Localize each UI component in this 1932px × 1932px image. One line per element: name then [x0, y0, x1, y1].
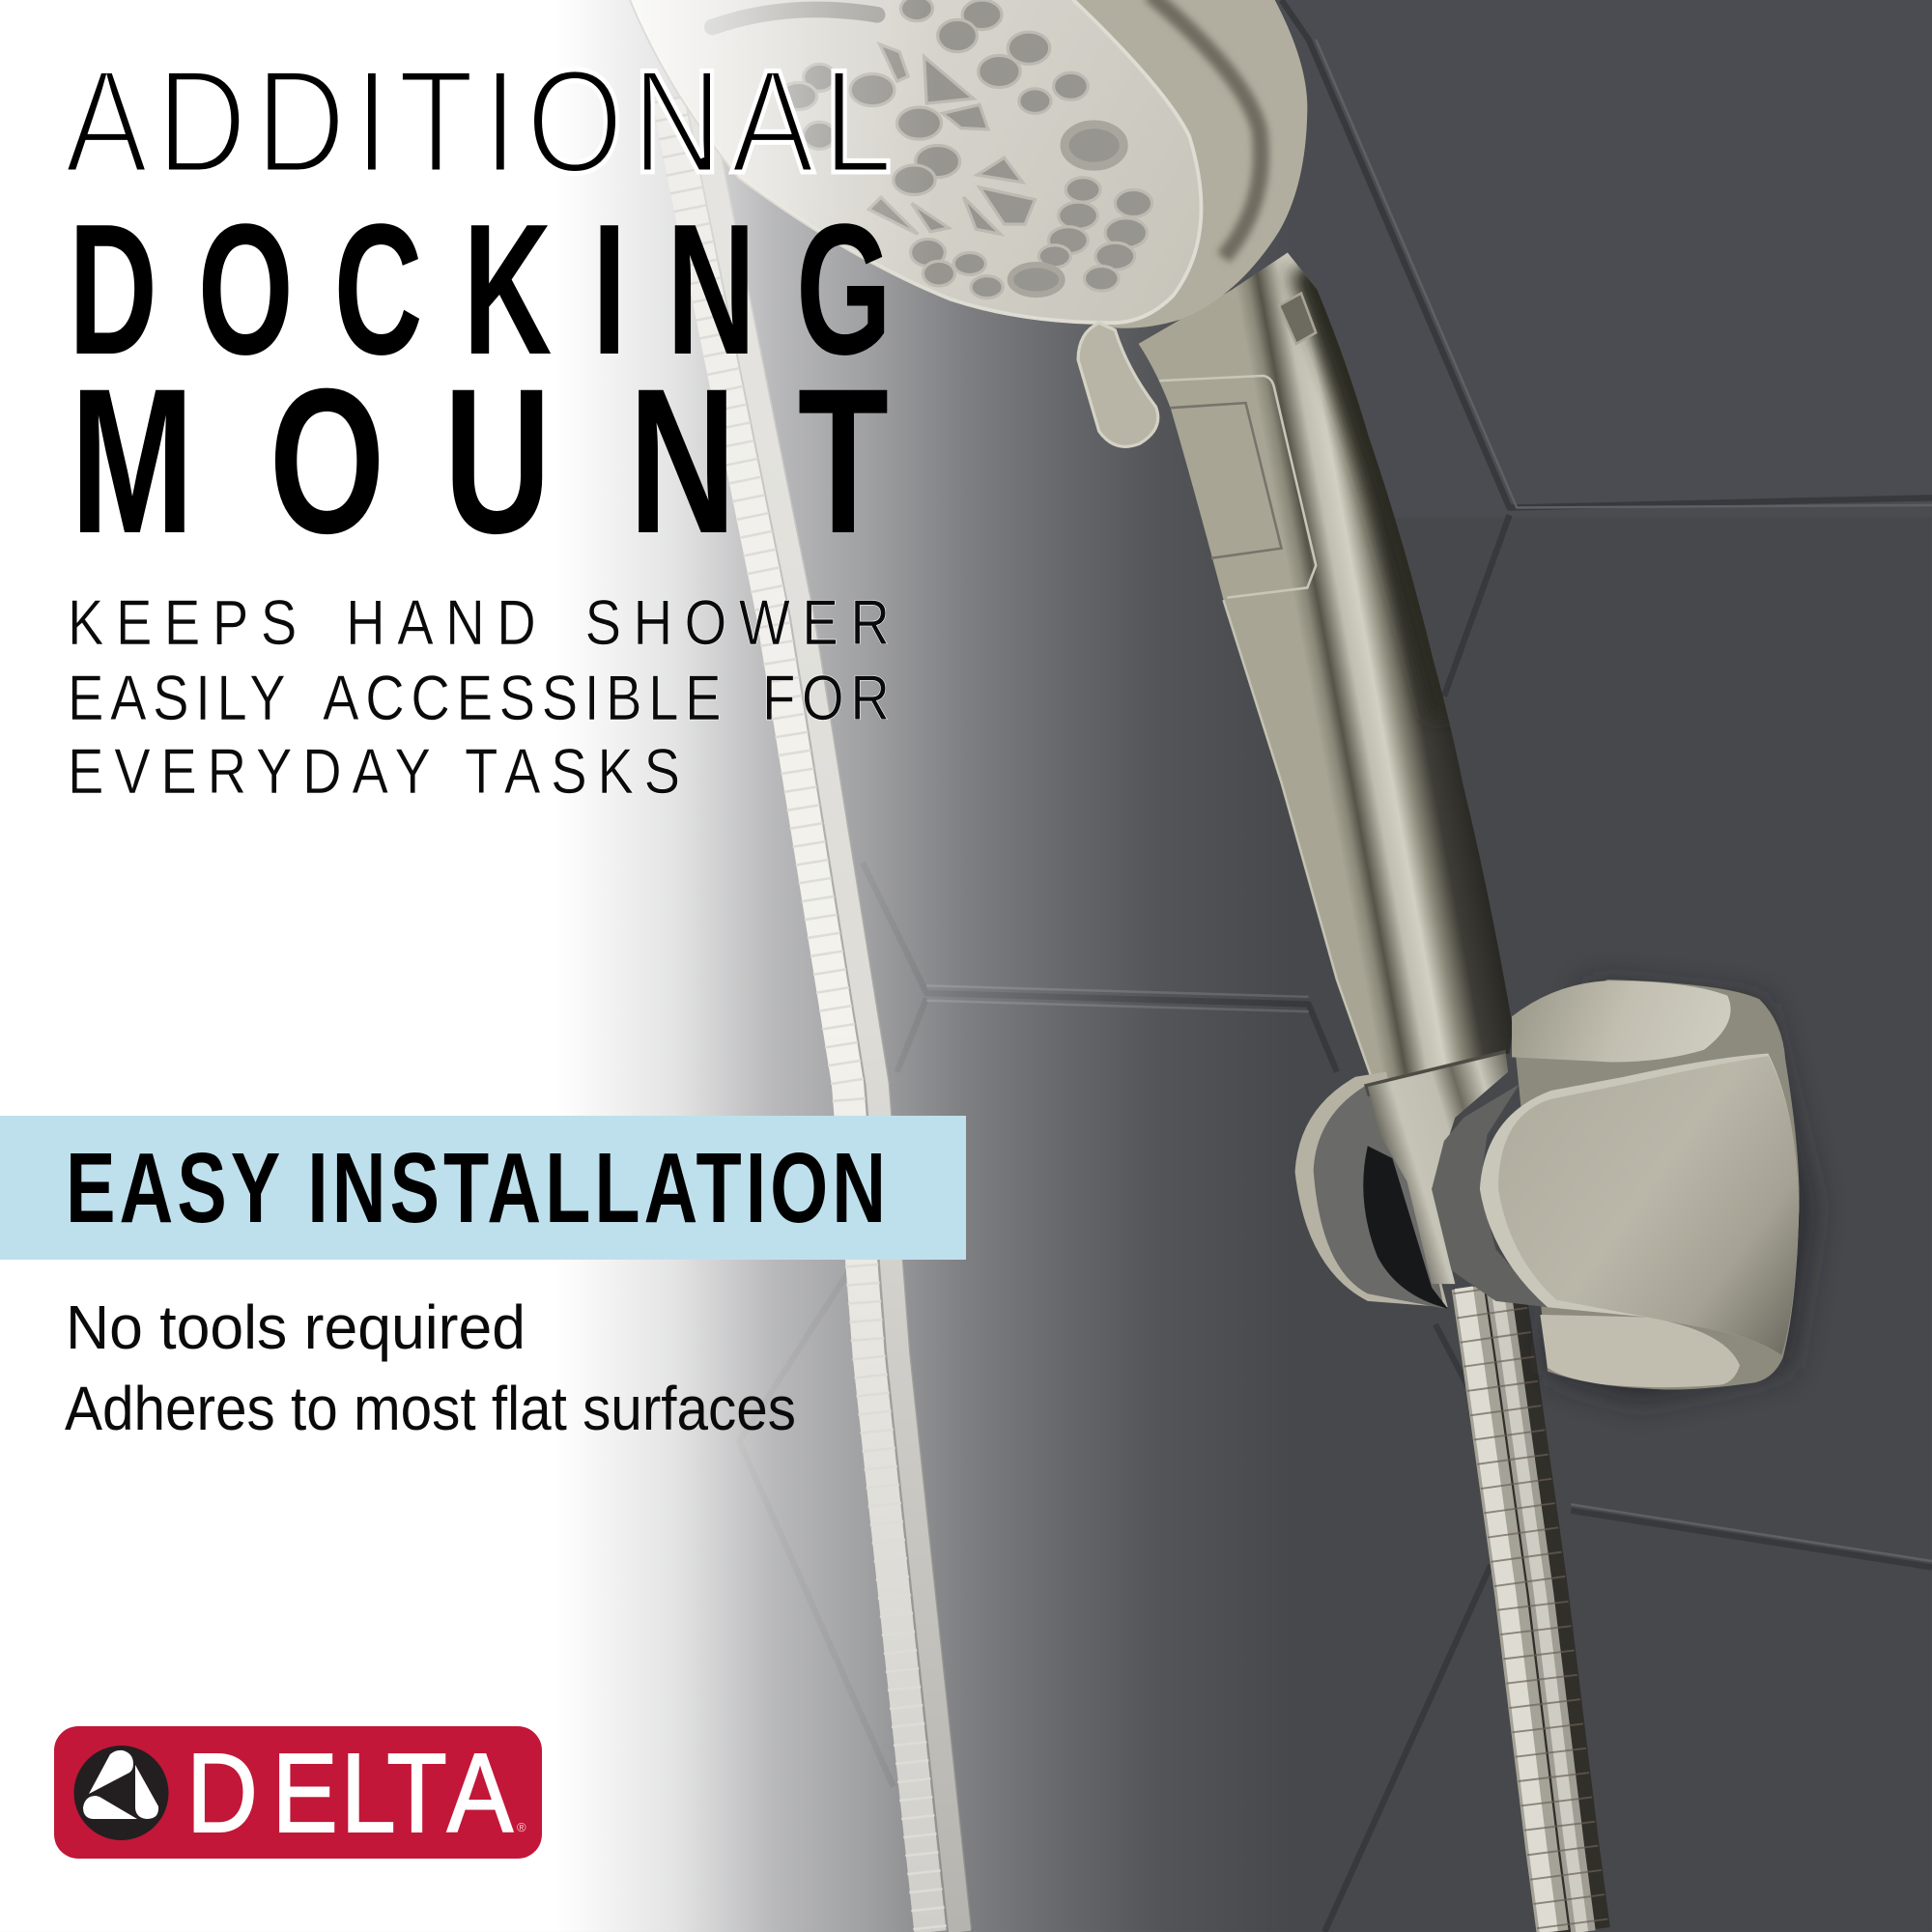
- background photo: shower on dark hex tile wall: [570, 0, 1932, 1932]
- mount bottom lobe: [1540, 1315, 1740, 1387]
- mount front cap: [1480, 1054, 1799, 1355]
- Delta logo: [54, 1726, 542, 1859]
- title line: ADDITIONAL: ADDITIONAL: [65, 39, 893, 203]
- title line: MOUNT: MOUNT: [71, 345, 889, 577]
- registered mark: ®: [517, 1820, 526, 1834]
- description line 1: KEEPS HAND SHOWER: [68, 587, 890, 658]
- head face fade: [631, 0, 898, 252]
- title: [65, 39, 893, 577]
- logo emblem: [73, 1746, 168, 1840]
- description text: [68, 587, 890, 807]
- mount shadow: [1548, 985, 1811, 1399]
- note line 2: Adheres to most flat surfaces: [65, 1374, 796, 1443]
- description line 2: EASILY ACCESSIBLE FOR: [68, 663, 890, 733]
- handle button panel: [1159, 376, 1316, 598]
- logo wordmark: DELTA: [186, 1731, 513, 1856]
- wall mount: [1295, 980, 1811, 1399]
- description line 3: EVERYDAY TASKS: [68, 736, 680, 807]
- left clip: [1295, 1072, 1448, 1307]
- lower handle collar: [1364, 1050, 1506, 1096]
- front hose: [1463, 1288, 1583, 1932]
- installation notes: [65, 1293, 796, 1443]
- callout band: easy installation: [0, 1116, 966, 1260]
- callout heading: EASY INSTALLATION: [66, 1133, 886, 1244]
- note line 1: No tools required: [66, 1293, 526, 1362]
- head rim: [1060, 0, 1307, 328]
- head face: [629, 0, 1202, 323]
- hand shower handle: [1139, 252, 1513, 1084]
- handle clip: [1279, 294, 1316, 344]
- shower head: [616, 0, 1307, 339]
- head diverter lever: [1078, 323, 1158, 446]
- spray nozzles: [780, 0, 1152, 298]
- right clip band: [1432, 1084, 1548, 1307]
- spray slot: [712, 10, 877, 27]
- background hose: [668, 99, 960, 1932]
- mount wall plate: [1512, 980, 1800, 1390]
- title line: DOCKING: DOCKING: [69, 185, 892, 393]
- mount top lobe: [1512, 980, 1731, 1062]
